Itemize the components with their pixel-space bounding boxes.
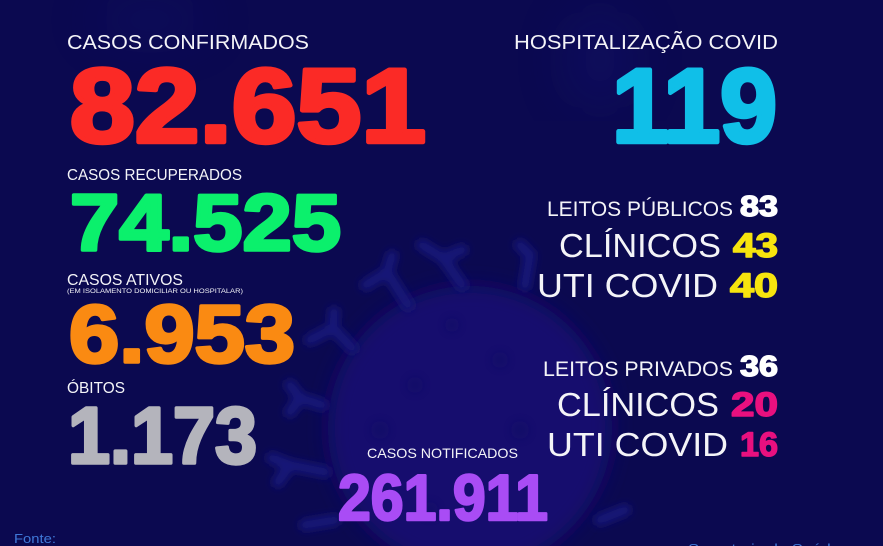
obitos	[67, 380, 257, 480]
number: 74.525: 74.525	[70, 178, 341, 267]
number: 1.173: 1.173	[68, 391, 257, 480]
row: uti covid publicos	[537, 267, 778, 305]
row: uti covid privados: UTI COVID	[547, 426, 728, 463]
source label: Fonte:	[14, 531, 56, 546]
heading: casos recuperados: CASOS RECUPERADOS	[67, 167, 242, 184]
number: 82.651: 82.651	[70, 48, 426, 165]
leitos publicos	[537, 191, 778, 305]
heading: casos confirmados: CASOS CONFIRMADOS	[67, 31, 309, 54]
number: 119: 119	[612, 48, 777, 165]
row: leitos publicos total	[547, 191, 778, 223]
row: uti covid publicos: 40	[730, 267, 778, 305]
row: clinicos privados: CLÍNICOS	[557, 386, 719, 423]
heading: hospitalizacao covid: HOSPITALIZAÇÃO COVID	[514, 31, 778, 54]
row: clinicos publicos: 43	[733, 227, 778, 265]
row: clinicos privados: 20	[731, 386, 778, 424]
leitos privados	[543, 351, 778, 464]
row: clinicos publicos	[559, 227, 778, 265]
casos recuperados	[67, 167, 341, 267]
row: leitos publicos total: LEITOS PÚBLICOS	[547, 198, 733, 221]
number: 261.911: 261.911	[338, 461, 548, 534]
row: leitos privados total	[543, 351, 778, 383]
row: clinicos publicos: CLÍNICOS	[559, 227, 721, 264]
virus illustration	[272, 245, 625, 546]
heading: obitos: ÓBITOS	[67, 380, 125, 397]
subheading: isolamento: (EM ISOLAMENTO DOMICILIAR OU HOSPITALAR)	[67, 288, 243, 295]
casos confirmados	[67, 31, 426, 165]
heading: casos notificados: CASOS NOTIFICADOS	[367, 445, 518, 461]
heading: casos ativos: CASOS ATIVOS	[67, 272, 183, 289]
row: uti covid publicos: UTI COVID	[537, 267, 718, 304]
row: leitos privados total: 36	[740, 351, 778, 383]
casos ativos	[67, 272, 295, 380]
row: clinicos privados	[557, 386, 778, 424]
row: leitos privados total: LEITOS PRIVADOS	[543, 358, 733, 381]
row: leitos publicos total: 83	[740, 191, 778, 223]
row: uti covid privados: 16	[740, 426, 778, 464]
number: 6.953: 6.953	[69, 289, 295, 380]
hospitalizacao covid	[514, 31, 778, 165]
background glow top	[90, 2, 635, 110]
casos notificados	[338, 445, 548, 534]
